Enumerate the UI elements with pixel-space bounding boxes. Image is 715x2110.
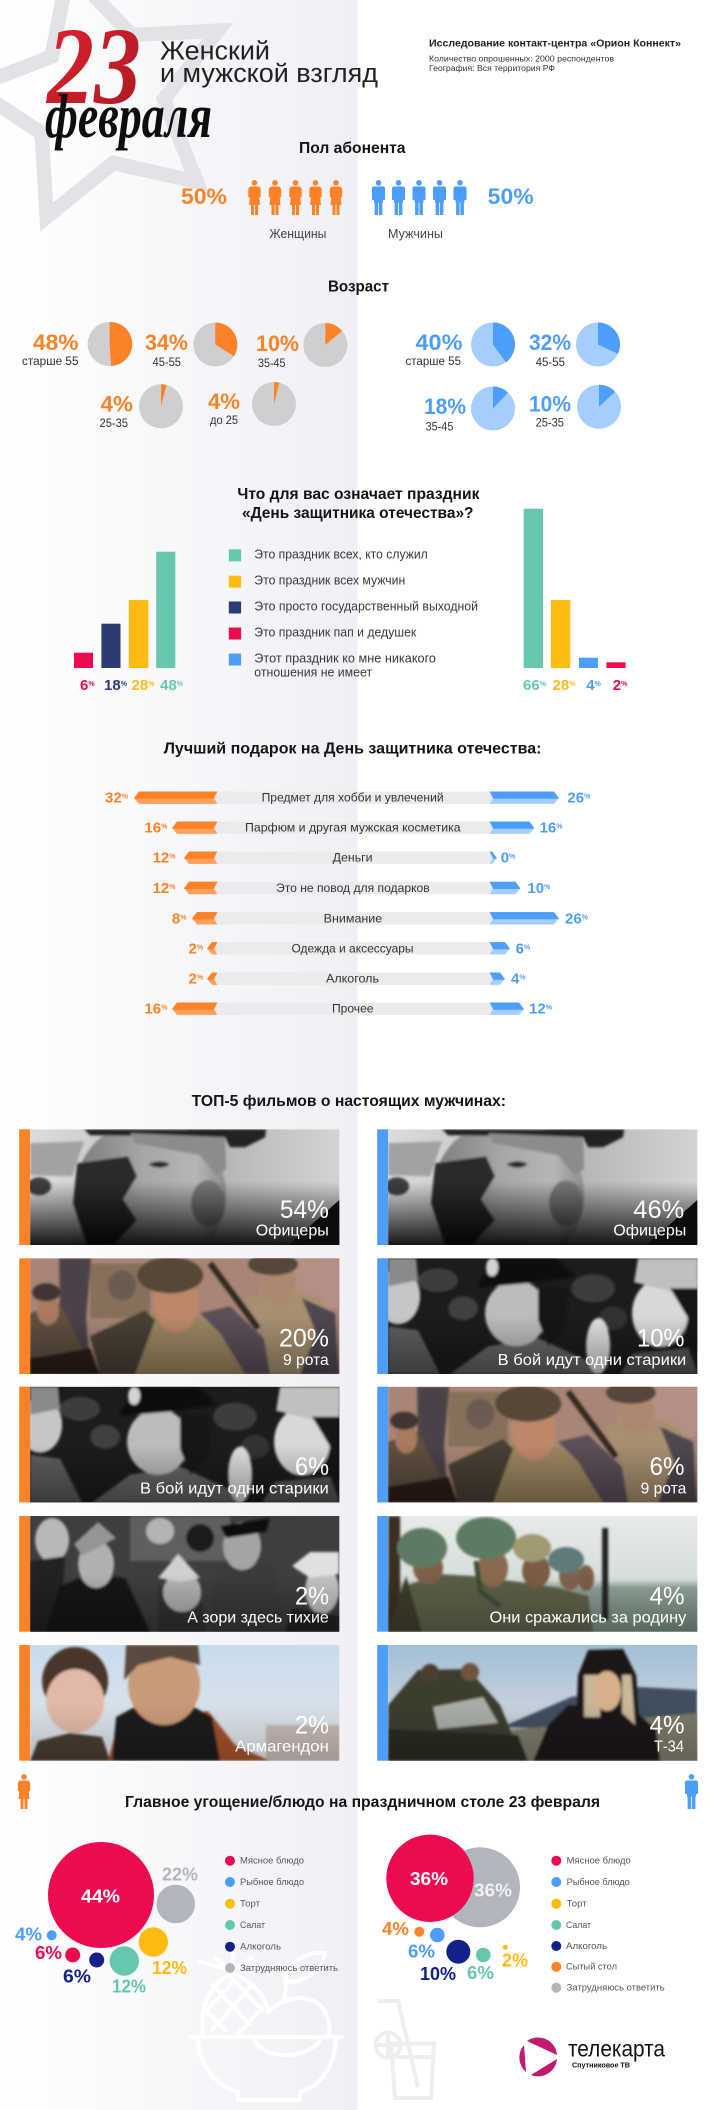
card: В бой идут одни старики 10 xyxy=(376,1258,698,1374)
bar chart: men: 2 xyxy=(613,677,621,694)
legend: women dishes xyxy=(225,1856,338,1973)
icon: drink xyxy=(376,2001,434,2098)
card: 9 рота 20: 20% xyxy=(279,1325,329,1353)
card: Т-34 4 xyxy=(377,1645,698,1761)
row: no reason: Это не повод для подарков xyxy=(276,881,430,895)
row: hobby xyxy=(105,790,591,807)
bar chart: men: % xyxy=(569,681,576,688)
pie 40: старше 55 xyxy=(406,356,461,368)
row: perfume: 16 xyxy=(540,820,556,837)
bubble chart: men xyxy=(382,1835,528,1984)
logo: 23 февраля: 23 xyxy=(45,5,141,127)
pie 32: 32% xyxy=(529,330,571,355)
pie 32: 45-55 xyxy=(536,357,565,369)
bar chart: men: 4 xyxy=(586,677,595,694)
pie 10: 35-45 xyxy=(258,358,286,370)
card: А зори здесь тихие 2: 2% xyxy=(295,1582,329,1610)
bar chart: women xyxy=(74,552,184,694)
heading: meaning of the holiday: «День защитника отечества»? xyxy=(242,505,474,522)
legend: meaning of the holiday: Это праздник пап и дедушек xyxy=(254,625,417,639)
row: attention: % xyxy=(582,914,589,921)
row: other: 12 xyxy=(529,1001,546,1018)
row: money: % xyxy=(169,854,176,861)
legend: men dishes: Салат xyxy=(566,1920,591,1930)
row: hobby: % xyxy=(122,794,129,801)
row: no reason: 12 xyxy=(153,880,169,897)
row: clothing: % xyxy=(524,944,531,951)
bar chart: women: 18 xyxy=(104,677,121,694)
row: attention xyxy=(172,910,589,927)
bubble chart: men: 6% xyxy=(408,1942,435,1962)
card: В бой идут одни старики 10: В бой идут одни старики xyxy=(498,1352,686,1369)
card: Офицеры 46: Офицеры xyxy=(613,1223,686,1240)
card: А зори здесь тихие 2: А зори здесь тихие xyxy=(187,1610,329,1627)
row: no reason xyxy=(153,880,551,897)
row: alcohol: 4 xyxy=(511,971,519,988)
bubble chart: men: 4% xyxy=(382,1919,409,1939)
legend: women dishes: Алкоголь xyxy=(240,1942,281,1952)
study details xyxy=(429,38,681,73)
row: attention: 26 xyxy=(565,910,582,927)
row: no reason: % xyxy=(544,884,551,891)
card: Т-34 4: 4% xyxy=(650,1711,684,1739)
panel: age women xyxy=(22,322,347,430)
men percent: 50% xyxy=(488,184,534,209)
icon: fruit bowl xyxy=(190,1952,342,2100)
bar chart: men: % xyxy=(540,681,547,688)
study details: Количество опрошенных: 2000 респондентов xyxy=(429,54,614,64)
row: perfume: % xyxy=(556,824,563,831)
bar chart: men: % xyxy=(621,681,628,688)
card: Офицеры 54: 54% xyxy=(280,1196,329,1224)
row: hobby: % xyxy=(584,794,591,801)
chart: best gift xyxy=(105,790,591,1018)
card: Т-34 4: Т-34 xyxy=(654,1739,684,1756)
study details: Исследование контакт-центра «Орион Коннект» xyxy=(429,38,681,50)
row: money xyxy=(153,850,516,867)
card: Офицеры 46: 46% xyxy=(633,1196,684,1224)
row: other: % xyxy=(546,1005,553,1012)
pie 10 xyxy=(529,385,621,430)
bar chart: women: 48 xyxy=(160,677,177,694)
legend: men dishes: Сытый стол xyxy=(566,1962,617,1972)
bar chart: women: 6 xyxy=(80,677,88,694)
card: 9 рота 6: 9 рота xyxy=(641,1480,686,1497)
pie 10: 10% xyxy=(256,331,299,356)
title xyxy=(160,38,378,88)
bubble chart: men: 36% xyxy=(474,1881,512,1901)
card: 9 рота 20 xyxy=(19,1253,340,1374)
logo: 23 февраля: февраля xyxy=(45,83,212,151)
row: alcohol: % xyxy=(197,975,204,982)
row: perfume: % xyxy=(161,824,168,831)
card: 9 рота 6 xyxy=(377,1382,698,1503)
row: money: 0 xyxy=(501,850,509,867)
card: 9 рота 6: 6% xyxy=(650,1453,684,1481)
women percent: 50% xyxy=(181,184,227,209)
bar chart: men xyxy=(523,509,628,694)
logo: Телекарта: телекарта xyxy=(568,2036,665,2062)
logo: Телекарта: Спутниковое ТВ xyxy=(572,2061,631,2070)
title: Женский xyxy=(160,38,270,66)
row: alcohol: Алкоголь xyxy=(326,972,379,986)
legend: men dishes: Торт xyxy=(567,1898,587,1908)
pie 10: 25-35 xyxy=(536,418,564,430)
legend: men dishes: Алкоголь xyxy=(566,1941,607,1951)
legend: meaning of the holiday: Это праздник всех мужчин xyxy=(254,573,405,587)
legend: men dishes: Затрудняюсь ответить xyxy=(567,1982,665,1992)
bar chart: men: 66 xyxy=(523,677,540,694)
pie 18: 35-45 xyxy=(426,422,453,434)
row: attention: % xyxy=(180,914,187,921)
logo: 23 февраля xyxy=(45,5,212,151)
row: other xyxy=(144,1001,553,1018)
panel: films men xyxy=(376,1119,698,1761)
row: attention: Внимание xyxy=(324,911,383,925)
legend: meaning of the holiday: отношения не имеет xyxy=(254,666,372,680)
pie 18 xyxy=(424,386,515,434)
panel: age men xyxy=(406,322,621,434)
legend: meaning of the holiday xyxy=(229,547,478,680)
card: В бой идут одни старики 6: В бой идут одни старики xyxy=(140,1480,329,1497)
legend: women dishes: Торт xyxy=(240,1898,260,1908)
pie 4 under 25: до 25 xyxy=(210,415,238,427)
pie 32 xyxy=(529,322,620,369)
card: Офицеры 46 xyxy=(377,1119,698,1271)
pie 4 under 25 xyxy=(208,382,296,427)
row: attention: 8 xyxy=(172,910,180,927)
bar chart: women: % xyxy=(177,681,184,688)
legend: men dishes: Рыбное блюдо xyxy=(567,1877,630,1887)
card: 9 рота 20: 9 рота xyxy=(283,1352,329,1369)
bar chart: men: % xyxy=(595,681,602,688)
row: hobby: 26 xyxy=(567,790,584,807)
pie 48: старше 55 xyxy=(22,356,78,368)
row: alcohol: % xyxy=(519,975,526,982)
label women: Женщины xyxy=(269,227,326,241)
row: other: 16 xyxy=(144,1001,161,1018)
legend: meaning of the holiday: Это просто государственный выходной xyxy=(254,599,478,613)
heading: best gift: Лучший подарок на День защитника отечества: xyxy=(164,740,541,757)
pie 34: 45-55 xyxy=(152,357,181,369)
row: alcohol xyxy=(188,971,526,988)
icons: men xyxy=(372,180,466,215)
bar chart: men: 28 xyxy=(552,677,569,694)
bubble chart: men: 36% xyxy=(410,1869,448,1889)
bubble chart: women: 12% xyxy=(112,1977,146,1997)
row: clothing: 6 xyxy=(516,940,524,957)
panel: gender split xyxy=(181,180,534,241)
bar chart: women: % xyxy=(121,681,128,688)
heading: gender: Пол абонента xyxy=(299,140,406,157)
card: Армагендон 2: Армагендон xyxy=(235,1739,329,1756)
panel: films women xyxy=(18,1119,340,1761)
card: Офицеры 54: Офицеры xyxy=(256,1223,329,1240)
legend: men dishes xyxy=(551,1856,665,1993)
legend: women dishes: Салат xyxy=(240,1920,265,1930)
legend: men dishes: Мясное блюдо xyxy=(567,1856,631,1866)
card: Офицеры 54 xyxy=(19,1119,340,1271)
heading: meaning of the holiday xyxy=(237,486,480,522)
pie 4: 25-35 xyxy=(100,418,128,430)
bubble chart: women: 12% xyxy=(152,1958,187,1978)
pie 48 xyxy=(22,322,132,368)
pie 40 xyxy=(406,322,515,368)
bubble chart: men: 2% xyxy=(502,1951,528,1971)
pie 10: 10% xyxy=(529,392,571,417)
row: other: Прочее xyxy=(332,1002,374,1016)
row: hobby: Предмет для хобби и увлечений xyxy=(262,791,444,805)
row: perfume: Парфюм и другая мужская косметика xyxy=(245,821,461,835)
pie 4: 4% xyxy=(100,392,133,417)
card: Они сражались за родину 4: 4% xyxy=(650,1582,684,1610)
bubble chart: women: 6% xyxy=(35,1943,62,1963)
heading: main dish: Главное угощение/блюдо на праздничном столе 23 февраля xyxy=(125,1794,600,1811)
row: hobby: 32 xyxy=(105,790,122,807)
row: money: Деньги xyxy=(333,851,373,865)
card: В бой идут одни старики 6: 6% xyxy=(295,1453,329,1481)
row: clothing: 2 xyxy=(188,940,197,957)
row: other: % xyxy=(161,1005,168,1012)
bubble chart: men: 6% xyxy=(467,1963,494,1983)
row: perfume xyxy=(144,820,563,837)
card: Они сражались за родину 4: Они сражались за родину xyxy=(490,1610,686,1627)
card: В бой идут одни старики 6 xyxy=(18,1387,340,1503)
card: Они сражались за родину 4 xyxy=(377,1516,698,1632)
row: money: % xyxy=(509,854,516,861)
pie 34 xyxy=(145,322,237,369)
card: Армагендон 2: 2% xyxy=(295,1711,329,1739)
label men: Мужчины xyxy=(388,227,443,241)
row: no reason: 10 xyxy=(527,880,544,897)
pie 34: 34% xyxy=(145,330,188,355)
pie 48: 48% xyxy=(33,330,78,355)
pie 40: 40% xyxy=(416,330,462,355)
row: alcohol: 2 xyxy=(188,971,197,988)
bubble chart: women: 22% xyxy=(162,1865,198,1885)
heading: meaning of the holiday: Что для вас означает праздник xyxy=(237,486,480,503)
bar chart: women: 28 xyxy=(132,677,148,694)
bubble chart: women: 6% xyxy=(63,1967,91,1987)
card: А зори здесь тихие 2 xyxy=(19,1516,340,1632)
row: clothing xyxy=(188,940,531,957)
bubble chart: women: 4% xyxy=(15,1925,42,1945)
heading: age: Возраст xyxy=(328,279,389,296)
pie 4 xyxy=(100,384,183,430)
study details: География: Вся территория РФ xyxy=(429,63,555,73)
pie 18: 18% xyxy=(424,394,466,419)
legend: women dishes: Рыбное блюдо xyxy=(240,1877,304,1887)
logo: Телекарта xyxy=(519,2036,665,2076)
row: money: 12 xyxy=(153,850,169,867)
pie 4 under 25: 4% xyxy=(208,389,240,414)
legend: women dishes: Мясное блюдо xyxy=(240,1856,304,1866)
row: clothing: % xyxy=(197,944,204,951)
bubble chart: women xyxy=(15,1842,198,1997)
legend: meaning of the holiday: Этот праздник ко мне никакого xyxy=(254,652,436,666)
title: и мужской взгляд xyxy=(160,60,378,88)
icon: man xyxy=(685,1774,698,1809)
card: Армагендон 2 xyxy=(19,1645,340,1761)
bubble chart: men: 10% xyxy=(420,1964,456,1984)
row: clothing: Одежда и аксессуары xyxy=(292,941,414,955)
legend: meaning of the holiday: Это праздник всех, кто служил xyxy=(254,547,428,561)
bubble chart: women: 44% xyxy=(81,1887,120,1907)
bar chart: women: % xyxy=(148,681,155,688)
icons: women xyxy=(248,180,342,215)
bar chart: women: % xyxy=(88,681,95,688)
row: no reason: % xyxy=(169,884,176,891)
legend: women dishes: Затрудняюсь ответить xyxy=(240,1963,338,1973)
heading: top 5 films: ТОП-5 фильмов о настоящих мужчинах: xyxy=(192,1093,506,1110)
row: perfume: 16 xyxy=(144,820,161,837)
card: В бой идут одни старики 10: 10% xyxy=(637,1325,684,1353)
icon: woman xyxy=(18,1774,30,1809)
pie 10 xyxy=(256,323,347,370)
